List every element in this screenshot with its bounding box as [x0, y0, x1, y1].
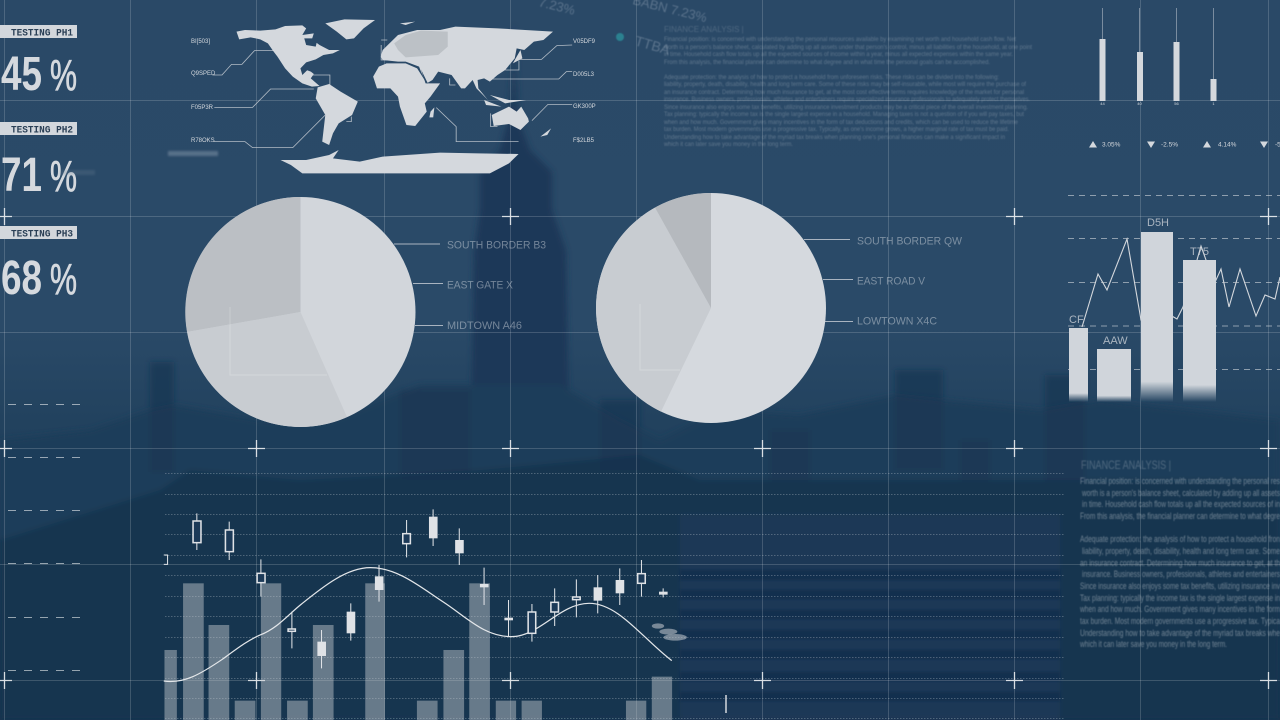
finance text block, top: FINANCE ANALYSIS |	[664, 25, 744, 34]
blurred smudge	[652, 623, 687, 641]
stat: testing ph3: %	[50, 255, 77, 304]
finance text block, lower right	[1079, 458, 1280, 649]
candlestick mini chart, top right: 40	[1137, 101, 1142, 106]
candlestick mini chart, top right: 44	[1100, 101, 1105, 106]
change indicators row: -2.5%	[1161, 142, 1178, 148]
candlestick mini chart, top right: 56	[1174, 101, 1179, 106]
bottom combo chart: bars, curve and candlesticks	[164, 509, 687, 720]
bar and line chart, right	[1068, 196, 1280, 402]
finance text block, top: Financial position: is concerned with understanding the personal resources available by examining net worth and household cash flow. Net	[664, 37, 1016, 43]
stat: testing ph1	[0, 25, 77, 101]
bar labels	[1069, 217, 1209, 347]
histogram bars	[164, 583, 672, 720]
stat: testing ph1: TESTING PH1	[11, 28, 73, 40]
pie chart: south border B3	[185, 197, 546, 427]
map: region codes: F$2LB5	[573, 138, 595, 144]
finance text block, top: Adequate protection: the analysis of how to protect a household from unforeseen risks. These risks can be divided into the following:	[664, 75, 999, 81]
candlestick mini chart, top right	[1100, 8, 1216, 106]
stat: testing ph1: %	[50, 51, 77, 100]
stat: testing ph3	[0, 226, 77, 305]
finance text block, top: tax burden. Most modern governments use a progressive tax. Typically, as one's income grows, a higher marginal rate of tax must be paid.	[664, 127, 1009, 133]
bar labels: T75	[1190, 246, 1209, 258]
world map with callouts	[191, 19, 596, 173]
change indicators row	[1089, 141, 1280, 148]
map: continents	[237, 19, 553, 173]
pie chart: south border QW	[596, 193, 963, 423]
finance text block, top: in time. Household cash flow totals up all the expected sources of income within a year, minus all expected expenses within the same year.	[664, 52, 1013, 58]
stat: testing ph2	[0, 122, 77, 202]
stat: testing ph3: 68	[1, 252, 42, 305]
labels	[447, 240, 546, 332]
map: leader lines	[212, 40, 572, 148]
finance text block, top: worth is a person's balance sheet, calculated by adding up all assets under that person's control, minus all liabilities of the household, at one point	[663, 45, 1032, 51]
stat: testing ph3: TESTING PH3	[11, 230, 73, 240]
finance text block, top: insurance. Business owners, professionals, athletes and entertainers require specialized insurance professionals to adequately protect themselves.	[664, 97, 1030, 103]
labels	[857, 236, 963, 328]
floating rotated tickers: TTBA	[633, 33, 673, 58]
bar labels: D5H	[1147, 217, 1169, 229]
labels: MIDTOWN A46	[447, 320, 522, 332]
map: region codes: R78OKS	[191, 138, 215, 144]
labels: EAST GATE X	[447, 280, 514, 292]
labels: SOUTH BORDER B3	[447, 240, 546, 252]
finance text block, top: when and how much. Government gives many incentives in the form of tax deductions and credits, which can be used to reduce the lifetime	[663, 120, 1019, 126]
map: region codes: V05DF9	[573, 39, 596, 45]
change indicators row: 4.14%	[1218, 142, 1237, 148]
candlestick mini chart, top right: 1	[1212, 101, 1215, 106]
labels: EAST ROAD V	[857, 276, 926, 288]
small vertical tick	[725, 695, 727, 713]
finance text block, top: Understanding how to take advantage of the myriad tax breaks when planning one's personal finances can make a significant impact in	[664, 135, 1005, 141]
map: region codes: D005L3	[573, 72, 595, 78]
labels: LOWTOWN X4C	[857, 316, 937, 328]
stat: testing ph1: 45	[1, 48, 42, 101]
finance text block, lower right: FINANCE ANALYSIS |	[1081, 458, 1171, 472]
map: region codes	[191, 39, 596, 144]
finance text block, top: liability, property, death, disability, health and long term care. Some of these risks may be self-insurable, while most will require the purchase of	[664, 82, 1026, 88]
finance text block, top: Tax planning: typically the income tax is the single largest expense in a household. Managing taxes is not a question of if you will pay taxes, but	[664, 112, 1024, 118]
map: region codes: BI[503]	[191, 39, 210, 45]
change indicators row: 3.05%	[1102, 142, 1121, 148]
stat: testing ph2: %	[50, 152, 77, 201]
test phase stats	[0, 25, 77, 305]
finance text block, top: Since insurance also enjoys some tax benefits, utilizing insurance investment products may be a critical piece of the overall investment planning.	[664, 105, 1028, 111]
finance text block, top: From this analysis, the financial planner can determine to what degree and in what time the personal goals can be accomplished.	[664, 60, 990, 66]
bar labels: CF	[1069, 314, 1084, 326]
candlesticks	[164, 509, 668, 668]
bar labels: AAW	[1103, 335, 1128, 347]
map: region codes: Q9SPED	[191, 71, 216, 77]
stat: testing ph2: 71	[1, 149, 42, 202]
labels: SOUTH BORDER QW	[857, 236, 963, 248]
finance text block, top: an insurance contract. Determining how much insurance to get, at the most cost effective terms requires knowledge of the market for personal	[664, 90, 1024, 96]
blurred blip	[60, 151, 218, 175]
floating rotated tickers	[537, 0, 709, 58]
stat: testing ph2: TESTING PH2	[11, 126, 73, 136]
map: region codes: F05P3R	[191, 105, 214, 111]
finance text block, lower right: which it can later save you money in the long term.	[1079, 639, 1227, 649]
smooth trend line	[164, 568, 672, 681]
finance text block, top: which it can later save you money in the long term.	[663, 142, 793, 148]
finance text block, top	[663, 25, 1032, 148]
map: region codes: GK300P	[573, 104, 596, 110]
